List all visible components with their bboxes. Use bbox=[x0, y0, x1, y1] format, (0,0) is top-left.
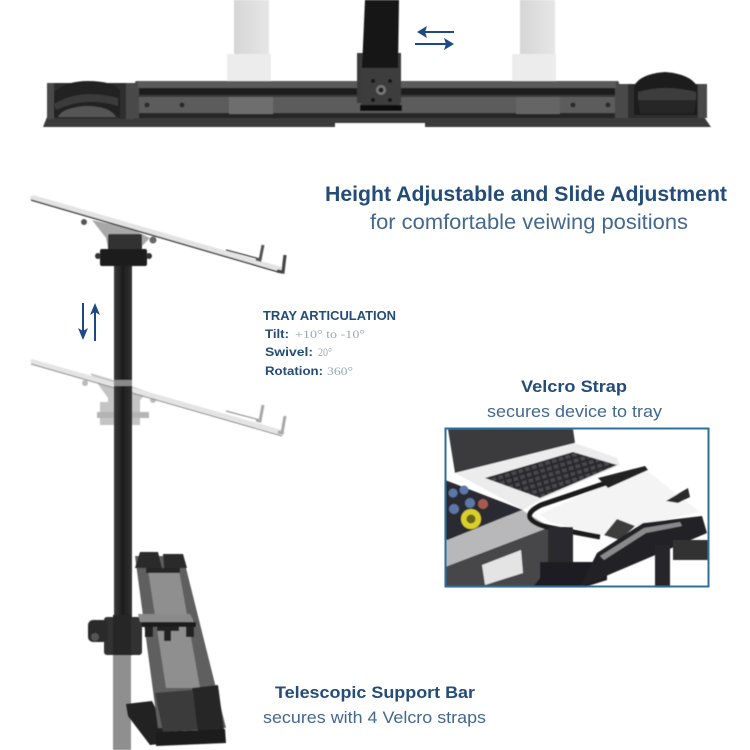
ghost tray plate bbox=[30, 359, 285, 436]
treadmill lower body bbox=[445, 527, 552, 587]
top velcro pads bbox=[135, 552, 187, 573]
icon: horizontal slide arrows bbox=[415, 26, 454, 50]
bottom velcro pads bbox=[155, 685, 226, 746]
tray articulation specs: Swivel: bbox=[265, 345, 313, 359]
ghost support posts bbox=[227, 0, 556, 84]
rear velcro cradle bbox=[126, 701, 170, 745]
pole clamp bbox=[88, 615, 142, 655]
center mast and mount bbox=[357, 0, 402, 111]
tray body bbox=[135, 556, 226, 728]
telescopic bar caption: secures with 4 Velcro straps bbox=[263, 708, 486, 727]
ghost mount bbox=[82, 373, 156, 425]
warning label bbox=[482, 550, 523, 585]
white device tray bbox=[540, 470, 700, 535]
upper tablet tray bbox=[30, 195, 285, 273]
support post bbox=[548, 527, 573, 563]
tray channel bbox=[135, 81, 619, 118]
tray base rails bbox=[43, 117, 711, 127]
heading: Height Adjustable and Slide Adjustment bbox=[325, 183, 727, 206]
subheading: for comfortable veiwing positions bbox=[370, 211, 688, 234]
laptop deck bbox=[455, 443, 620, 510]
tray articulation specs: 360° bbox=[327, 364, 353, 378]
base clamp bbox=[533, 562, 607, 587]
right support leg bbox=[655, 545, 670, 587]
lower ghost tablet tray bbox=[30, 359, 285, 436]
telescopic pole bbox=[113, 262, 132, 750]
treadmill silver body bbox=[445, 510, 550, 567]
tray plate bbox=[30, 195, 285, 273]
tray articulation specs: Tilt: bbox=[265, 327, 289, 341]
right velcro pad bbox=[619, 72, 707, 118]
velcro strap heading: Velcro Strap bbox=[521, 377, 627, 396]
right support arm bbox=[673, 540, 708, 560]
velcro strap photo bbox=[445, 428, 709, 587]
tray articulation specs: +10° to -10° bbox=[295, 327, 365, 341]
bottom folded tray bbox=[88, 552, 226, 746]
laptop screen bbox=[448, 429, 575, 473]
velcro strap caption: secures device to tray bbox=[487, 402, 663, 421]
top slide tray photo bbox=[43, 0, 711, 127]
keyboard bbox=[485, 452, 617, 498]
cross bracket bbox=[138, 614, 196, 641]
left velcro pad bbox=[47, 81, 135, 119]
tray articulation specs: 20° bbox=[318, 345, 332, 359]
photo frame bbox=[446, 428, 708, 586]
slide rail arm bbox=[580, 516, 707, 587]
icon: vertical height arrows bbox=[78, 303, 100, 341]
console buttons bbox=[448, 486, 488, 529]
tray articulation specs: TRAY ARTICULATION bbox=[263, 309, 396, 323]
telescopic bar heading: Telescopic Support Bar bbox=[275, 683, 475, 702]
velcro strap bbox=[529, 483, 606, 537]
tray mount bbox=[81, 219, 156, 266]
treadmill console bbox=[445, 480, 523, 540]
tray articulation specs: Rotation: bbox=[265, 364, 323, 378]
tray articulation specs bbox=[263, 309, 396, 378]
